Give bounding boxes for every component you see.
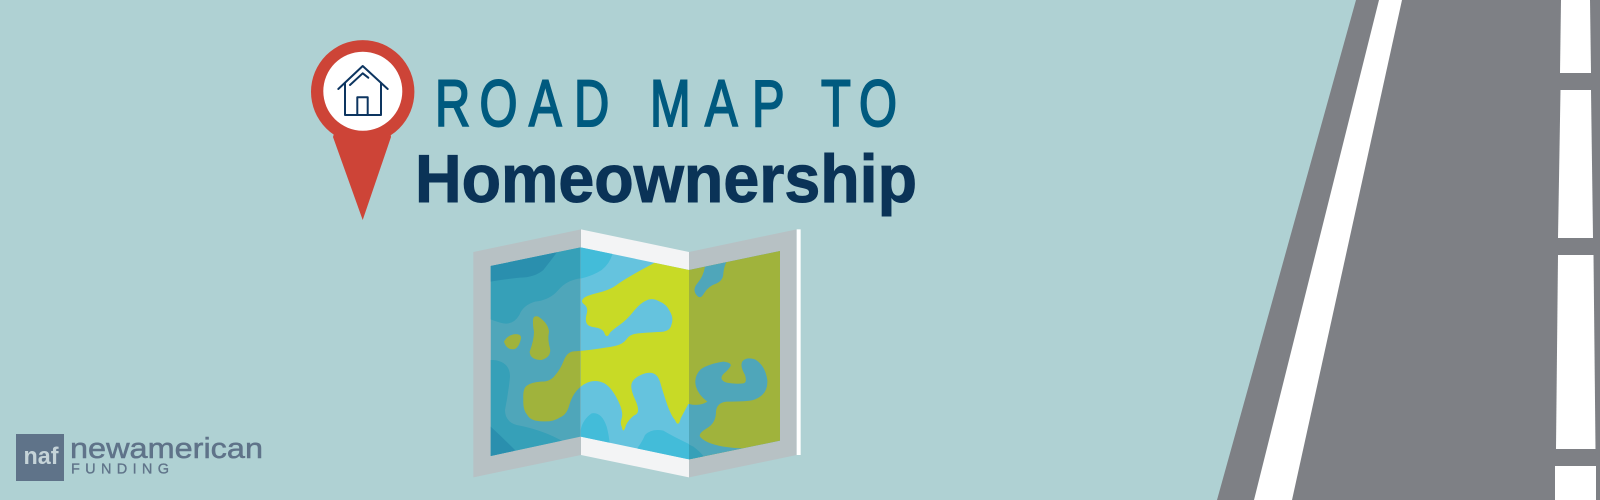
pin inner circle bbox=[323, 52, 402, 131]
map right panel frame bbox=[689, 229, 797, 477]
island: great britain bbox=[530, 316, 550, 360]
road edge line bbox=[1254, 0, 1402, 500]
logo: new american funding bbox=[16, 433, 263, 481]
northern sea bbox=[694, 262, 727, 297]
title: homeownership: Homeownership bbox=[415, 141, 917, 217]
logo initials: naf bbox=[24, 443, 59, 470]
map centre panel frame bbox=[581, 229, 689, 477]
pin body bbox=[311, 40, 414, 220]
logo wordmark: newamerican bbox=[70, 433, 263, 465]
icon: house bbox=[338, 66, 388, 115]
deep water corner bbox=[689, 444, 704, 460]
folded map bbox=[473, 229, 801, 477]
road surface bbox=[1217, 0, 1600, 500]
map left panel frame bbox=[473, 229, 581, 477]
map left panel bbox=[490, 248, 580, 456]
map right panel bbox=[689, 251, 780, 460]
icon: location pin with house bbox=[311, 40, 414, 220]
southern sea bbox=[689, 358, 767, 463]
map right white edge bbox=[797, 229, 801, 455]
title: road map to: ROAD MAP TO bbox=[435, 67, 897, 141]
road bbox=[1217, 0, 1600, 500]
logo square bbox=[16, 434, 64, 481]
centre dashes bbox=[1555, 0, 1596, 500]
map centre panel bbox=[580, 248, 689, 460]
island: ireland bbox=[504, 334, 521, 349]
logo funding line: FUNDING bbox=[71, 461, 169, 477]
